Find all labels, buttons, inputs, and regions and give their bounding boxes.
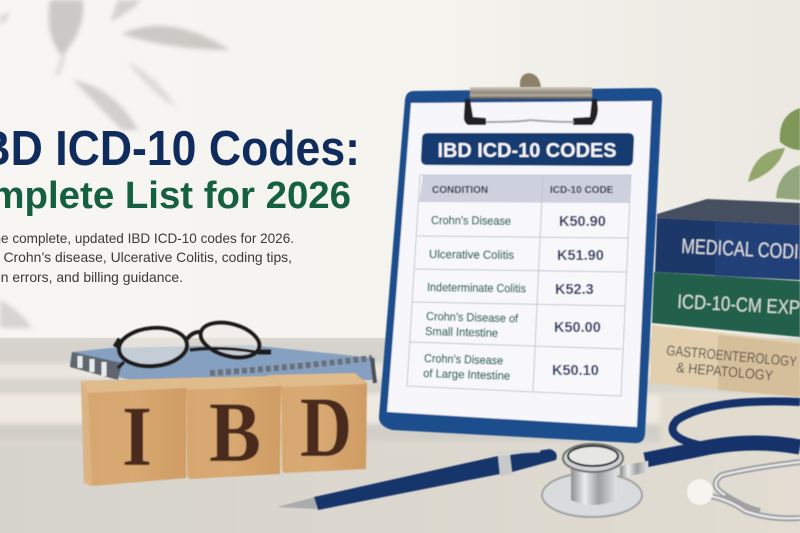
- earpiece: [687, 462, 800, 518]
- paper sheet: [387, 101, 652, 427]
- table title banner: [421, 133, 634, 166]
- pen: [277, 449, 557, 510]
- row: Indeterminate Colitis: Indeterminate Colitis: [427, 281, 526, 295]
- row: Crohn's Disease of Large Intestine: of Large Intestine: [423, 367, 510, 383]
- row: Indeterminate Colitis: K52.3: [555, 282, 594, 298]
- row: Ulcerative Colitis: [429, 248, 604, 264]
- book: icd-10-cm expert: [652, 272, 800, 337]
- block: D: D: [300, 379, 352, 475]
- row: Crohn's Disease of Small Intestine: K50.00: [554, 320, 601, 336]
- background wall: [0, 0, 800, 345]
- row: Indeterminate Colitis: [427, 281, 594, 298]
- book: gastroenterology and hepatology: [650, 325, 800, 397]
- row: Crohn's Disease: K50.90: [559, 214, 606, 230]
- metal clip: [464, 73, 598, 125]
- leaf shadows on wall: [0, 0, 230, 328]
- block: B: [178, 376, 281, 480]
- desk surface: [0, 338, 800, 533]
- row: Crohn's Disease of Small Intestine: [425, 310, 601, 340]
- block: I: I: [122, 388, 152, 484]
- plant leaves: [748, 108, 800, 200]
- title: [0, 121, 360, 217]
- wooden IBD blocks: [81, 373, 367, 486]
- row: Crohn's Disease of Large Intestine: Crohn’s Disease: [424, 352, 503, 367]
- table header: ICD-10 CODE: [550, 185, 614, 196]
- clipboard: [379, 73, 662, 443]
- row: Ulcerative Colitis: Ulcerative Colitis: [429, 248, 514, 262]
- codes table: [407, 175, 631, 396]
- stacked books: [650, 199, 800, 397]
- block: D: [268, 373, 367, 475]
- row: Ulcerative Colitis: K51.90: [557, 248, 604, 264]
- row: Crohn's Disease of Small Intestine: Small Intestine: [425, 325, 498, 340]
- table header: [419, 175, 631, 203]
- block: B: B: [209, 384, 261, 480]
- row: Crohn's Disease: [431, 214, 606, 230]
- clipboard board: [379, 88, 662, 443]
- table header: CONDITION: [432, 185, 488, 196]
- row: Crohn's Disease: Crohn’s Disease: [431, 214, 511, 228]
- table title banner: IBD ICD-10 CODES: [438, 140, 616, 162]
- row: Crohn's Disease of Large Intestine: [423, 352, 599, 383]
- description text: [0, 231, 294, 285]
- spiral notebook: [70, 345, 375, 383]
- book: gastroenterology and hepatology: & HEPATOLOGY: [676, 360, 774, 384]
- row: Crohn's Disease of Small Intestine: Crohn’s Disease of: [426, 310, 519, 325]
- book: medical coding: [655, 199, 800, 280]
- stethoscope: [542, 401, 800, 518]
- row: Crohn's Disease of Large Intestine: K50.10: [552, 363, 599, 379]
- block: I: [81, 378, 186, 486]
- glasses: [115, 317, 271, 369]
